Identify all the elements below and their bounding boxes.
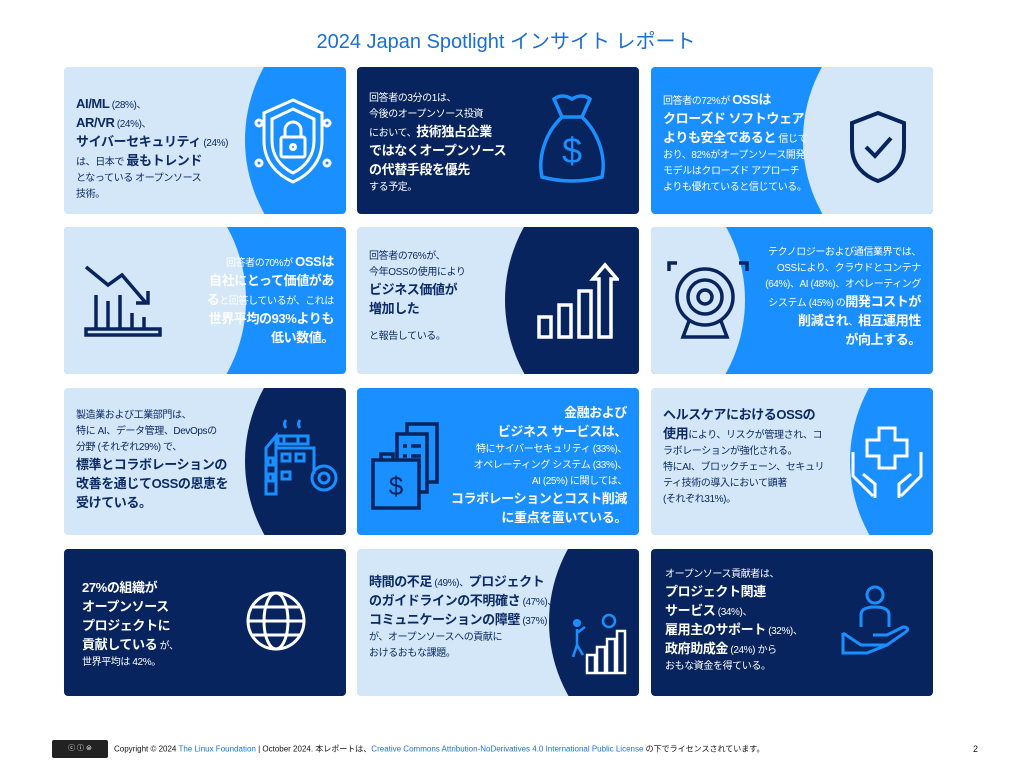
- text: finance: 特にサイバーセキュリティ (33%)、: [476, 444, 627, 455]
- text: telecom: システム (45%) の開発コストが: [768, 294, 921, 309]
- text: value: 回答者の70%が OSSは: [226, 254, 334, 269]
- panel: 72% OSS safer: [651, 67, 933, 214]
- text: finance: コラボレーションとコスト削減: [451, 491, 627, 506]
- text: value: 自社にとって価値があ: [209, 273, 334, 288]
- text: finance: に重点を置いている。: [501, 510, 627, 525]
- icon: shield lock: [254, 98, 332, 184]
- text: telecom: 削減され、相互運用性: [798, 313, 921, 328]
- text: finance: 金融および: [564, 405, 627, 420]
- title: 2024 Japan Spotlight インサイト レポート: [316, 31, 696, 53]
- text: trends: 技術。: [76, 189, 105, 200]
- text: trends: [76, 96, 228, 200]
- text: safety: おり、82%がオープンソース開発: [663, 150, 805, 161]
- text: barriers: が、オープンソースへの貢献に: [369, 632, 502, 643]
- text: business value: [369, 250, 466, 342]
- text: barriers: のガイドラインの不明確さ (47%)、: [369, 593, 557, 608]
- text: contribute: [82, 580, 179, 668]
- text: funding: おもな資金を得ている。: [665, 661, 771, 672]
- text: safety: クローズド ソフトウェア: [663, 111, 804, 126]
- icon: globe: [246, 592, 306, 650]
- text: business value: 回答者の76%が、: [369, 251, 445, 262]
- panel: 76% business value: [357, 227, 639, 374]
- panel: 70% value: [64, 227, 346, 374]
- text: alternatives: ではなくオープンソース: [369, 143, 506, 158]
- icon: documents: [371, 422, 439, 510]
- text: telecom: OSSにより、クラウドとコンテナ: [777, 263, 921, 274]
- footer: Copyright © 2024 The Linux Foundation | October 2024. 本レポートは、Creative Commons Attribution-NoDerivatives 4.0 International Public License の下でライセンスされています。: [114, 744, 764, 754]
- footer: [52, 740, 764, 758]
- text: telecom: [765, 246, 922, 347]
- panel: funding: [651, 549, 933, 696]
- panel: finance: [357, 388, 639, 535]
- text: contribute: プロジェクトに: [82, 618, 170, 633]
- panel: barriers: [357, 549, 639, 696]
- text: safety: モデルはクローズド アプローチ: [663, 166, 799, 177]
- text: manufacturing: 受けている。: [76, 495, 152, 510]
- text: healthcare: ヘルスケアにおけるOSSの: [663, 407, 815, 422]
- panel: technology & telecom: [651, 227, 933, 374]
- text: manufacturing: 分野 (それぞれ29%) で、: [76, 442, 182, 453]
- icon: falling chart: [84, 266, 162, 337]
- text: trends: サイバーセキュリティ (24%): [76, 134, 228, 149]
- icon: webcam: [667, 261, 749, 339]
- text: alternatives: 回答者の3分の1は、: [369, 93, 456, 104]
- text: business value: と報告している。: [369, 331, 446, 342]
- text: trends: AI/ML (28%)、: [76, 96, 146, 111]
- text: funding: 雇用主のサポート (32%)、: [665, 622, 802, 637]
- text: barriers: おけるおもな課題。: [369, 648, 455, 659]
- text: funding: サービス (34%)、: [665, 603, 752, 618]
- text: barriers: 時間の不足 (49%)、プロジェクト: [369, 574, 544, 589]
- panel: AI/ML trends: [64, 67, 346, 214]
- icon: money bag: [539, 94, 605, 183]
- icon: money bag: $: [562, 130, 582, 171]
- icon: cc license: [52, 740, 108, 758]
- text: manufacturing: 標準とコラボレーションの: [76, 457, 227, 472]
- icon: climbing bars gear: [572, 614, 626, 674]
- text: trends: は、日本で 最もトレンド: [76, 153, 202, 168]
- page number: 2: [973, 744, 978, 754]
- text: healthcare: 使用により、リスクが管理され、コ: [663, 426, 822, 441]
- text: safety: よりも安全であると 信じて: [663, 130, 807, 145]
- text: manufacturing: 特に AI、データ管理、DevOpsの: [76, 426, 217, 437]
- text: healthcare: (それぞれ31%)。: [663, 494, 736, 505]
- text: contribute: オープンソース: [82, 599, 169, 614]
- icon: person on hand: [842, 586, 909, 654]
- text: healthcare: 特にAI、ブロックチェーン、セキュリ: [663, 462, 824, 473]
- text: finance: ビジネス サービスは、: [498, 424, 627, 439]
- text: finance: オペレーティング システム (33%)、: [474, 460, 627, 471]
- text: funding: オープンソース貢献者は、: [665, 569, 779, 580]
- text: alternatives: する予定。: [369, 182, 417, 193]
- panel: 27% contribute: [64, 549, 346, 696]
- text: safety: よりも優れていると信じている。: [663, 182, 806, 193]
- text: business value: 増加した: [369, 301, 419, 316]
- icon: cc license: ⓒ ⓘ ⊜: [68, 745, 92, 752]
- text: finance: [451, 405, 628, 525]
- text: value: 世界平均の93%よりも: [209, 311, 334, 326]
- text: safety: 回答者の72%が OSSは: [663, 92, 771, 107]
- text: alternatives: の代替手段を優先: [369, 162, 470, 177]
- icon: check shield: [850, 110, 906, 184]
- text: finance: AI (25%) に関しては、: [532, 476, 627, 487]
- panel: manufacturing: [64, 388, 346, 535]
- icon: factory gear: [264, 419, 338, 496]
- text: alternatives: において、技術独占企業: [369, 124, 492, 139]
- icon: rising bars: [537, 262, 619, 339]
- text: contribute: 世界平均は 42%。: [82, 657, 161, 668]
- icon: documents: $: [389, 471, 404, 501]
- text: trends: AR/VR (24%)、: [76, 115, 151, 130]
- text: trends: となっている オープンソース: [76, 173, 201, 184]
- text: manufacturing: 製造業および工業部門は、: [76, 410, 191, 421]
- panel: healthcare: [651, 388, 933, 535]
- text: alternatives: 今後のオープンソース投資: [369, 109, 483, 120]
- text: barriers: コミュニケーションの障壁 (37%): [369, 612, 547, 627]
- text: contribute: 貢献している が、: [82, 637, 179, 652]
- text: value: ると回答しているが、これは: [207, 292, 334, 307]
- text: healthcare: ティ技術の導入において顕著: [663, 478, 787, 489]
- text: funding: 政府助成金 (24%) から: [665, 641, 777, 656]
- text: funding: [665, 568, 802, 672]
- text: funding: プロジェクト関連: [665, 584, 766, 599]
- text: healthcare: ラボレーションが強化される。: [663, 446, 797, 457]
- text: contribute: 27%の組織が: [82, 580, 157, 595]
- text: business value: ビジネス価値が: [369, 282, 457, 297]
- text: telecom: テクノロジーおよび通信業界では、: [768, 247, 921, 258]
- text: alternatives: [369, 92, 506, 193]
- text: safety: [663, 92, 807, 193]
- text: manufacturing: 改善を通じてOSSの恩恵を: [76, 476, 228, 491]
- text: value: [207, 254, 334, 345]
- text: business value: 今年OSSの使用により: [369, 267, 466, 278]
- text: telecom: が向上する。: [845, 332, 921, 347]
- text: telecom: (64%)、AI (48%)、オペレーティング: [765, 279, 921, 290]
- text: barriers: [369, 574, 557, 659]
- text: manufacturing: [76, 409, 228, 510]
- panel: 1/3 respondents: [357, 67, 639, 214]
- text: healthcare: [663, 407, 824, 505]
- icon: hands cross: [852, 426, 922, 498]
- text: value: 低い数値。: [271, 330, 334, 345]
